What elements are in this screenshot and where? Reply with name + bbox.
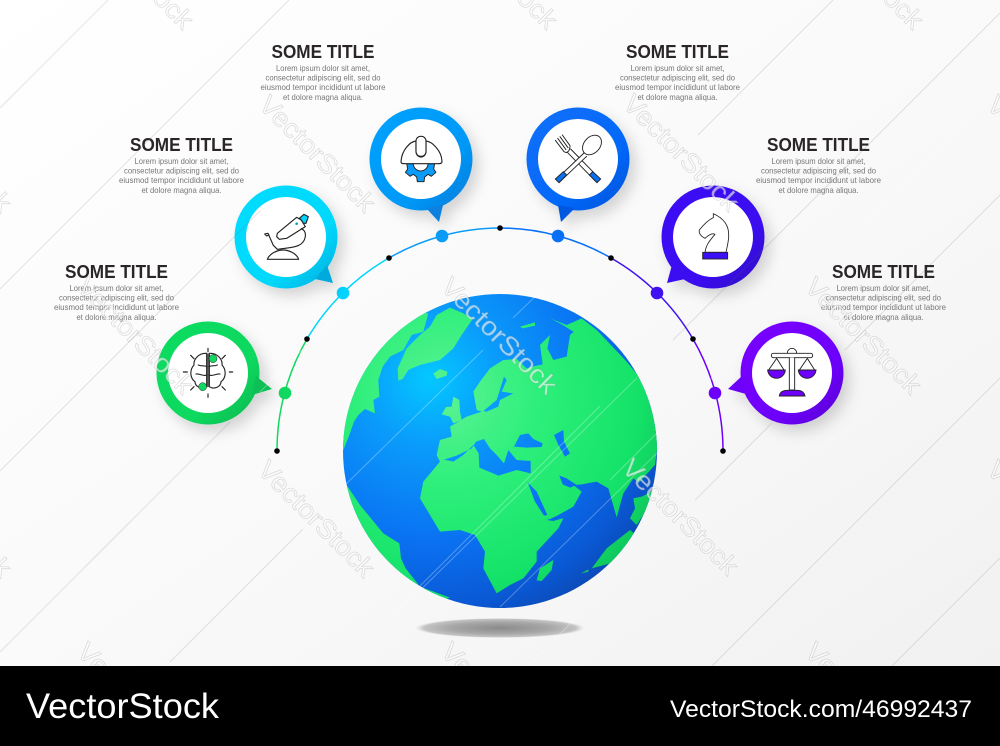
pin 5: chess knight	[662, 186, 764, 288]
icon: brain	[183, 348, 233, 397]
text block 4: eiusmod tempor incididunt ut labore	[615, 82, 740, 92]
text block 2: Lorem ipsum dolor sit amet,	[134, 156, 228, 166]
text block 5: consectetur adipiscing elit, sed do	[761, 166, 876, 176]
text block 1: SOME TITLE	[65, 262, 168, 282]
text block 2: eiusmod tempor incididunt ut labore	[119, 175, 244, 185]
text block 3: et dolore magna aliqua.	[283, 92, 363, 102]
text block 3: Lorem ipsum dolor sit amet,	[276, 63, 370, 73]
pin 6: scales	[728, 322, 844, 424]
text block 3	[260, 42, 386, 102]
watermark overlay: VectorStock	[799, 271, 928, 401]
text block 1: Lorem ipsum dolor sit amet,	[70, 283, 164, 293]
text block 6: consectetur adipiscing elit, sed do	[826, 292, 941, 302]
pin 4: fork and spoon	[526, 108, 630, 222]
ground shadow	[415, 618, 585, 638]
text block 5: eiusmod tempor incididunt ut labore	[756, 175, 881, 185]
text block 4: Lorem ipsum dolor sit amet,	[630, 63, 724, 73]
pin 2: microscope	[234, 186, 338, 288]
text block 6	[821, 262, 946, 322]
icon: chess knight	[699, 214, 729, 259]
globe	[333, 294, 673, 608]
text block 5	[756, 135, 881, 195]
text block 6: SOME TITLE	[832, 262, 935, 282]
land masses	[333, 308, 673, 605]
footer logo text: VectorStock	[26, 687, 220, 726]
text block 4: et dolore magna aliqua.	[638, 92, 718, 102]
text block 4: consectetur adipiscing elit, sed do	[620, 72, 735, 82]
text block 1: eiusmod tempor incididunt ut labore	[54, 302, 179, 312]
text block 6: eiusmod tempor incididunt ut labore	[821, 302, 946, 312]
timeline coloured nodes	[279, 230, 721, 399]
icon: fork and spoon	[555, 131, 605, 183]
text block 1: et dolore magna aliqua.	[76, 312, 156, 322]
text block 5: et dolore magna aliqua.	[778, 185, 858, 195]
text block 2: SOME TITLE	[130, 135, 233, 155]
watermark overlay: VectorStock	[252, 454, 381, 584]
inland seas	[444, 377, 577, 521]
pin 3: helmet and gear	[370, 108, 472, 222]
text block 3: SOME TITLE	[272, 42, 374, 62]
text block 5: SOME TITLE	[767, 135, 870, 155]
icon: helmet and gear	[401, 136, 442, 182]
text block 2: et dolore magna aliqua.	[142, 185, 222, 195]
text block 2: consectetur adipiscing elit, sed do	[124, 166, 239, 176]
footer image id: VectorStock.com/46992437	[670, 696, 972, 723]
footer bar	[0, 666, 1000, 746]
text block 2	[119, 135, 244, 195]
watermark overlay: VectorStock	[435, 271, 564, 401]
text block 4: SOME TITLE	[626, 42, 729, 62]
pin 1: brain	[156, 322, 272, 424]
text block 3: eiusmod tempor incididunt ut labore	[260, 82, 386, 92]
text block 6: et dolore magna aliqua.	[844, 312, 924, 322]
watermark overlay: VectorStock	[617, 88, 746, 218]
text block 6: Lorem ipsum dolor sit amet,	[836, 283, 930, 293]
text block 1: consectetur adipiscing elit, sed do	[59, 292, 174, 302]
text block 1	[54, 262, 179, 322]
timeline arc	[277, 228, 723, 451]
icon: scales	[768, 348, 816, 396]
watermark overlay: VectorStock	[616, 452, 745, 582]
watermark overlay: VectorStock	[71, 271, 200, 401]
text block 4	[615, 42, 740, 102]
text block 5: Lorem ipsum dolor sit amet,	[772, 156, 866, 166]
watermark overlay: VectorStock	[253, 89, 382, 219]
icon: microscope	[265, 214, 308, 259]
timeline black dots	[274, 225, 726, 454]
text block 3: consectetur adipiscing elit, sed do	[266, 72, 381, 82]
